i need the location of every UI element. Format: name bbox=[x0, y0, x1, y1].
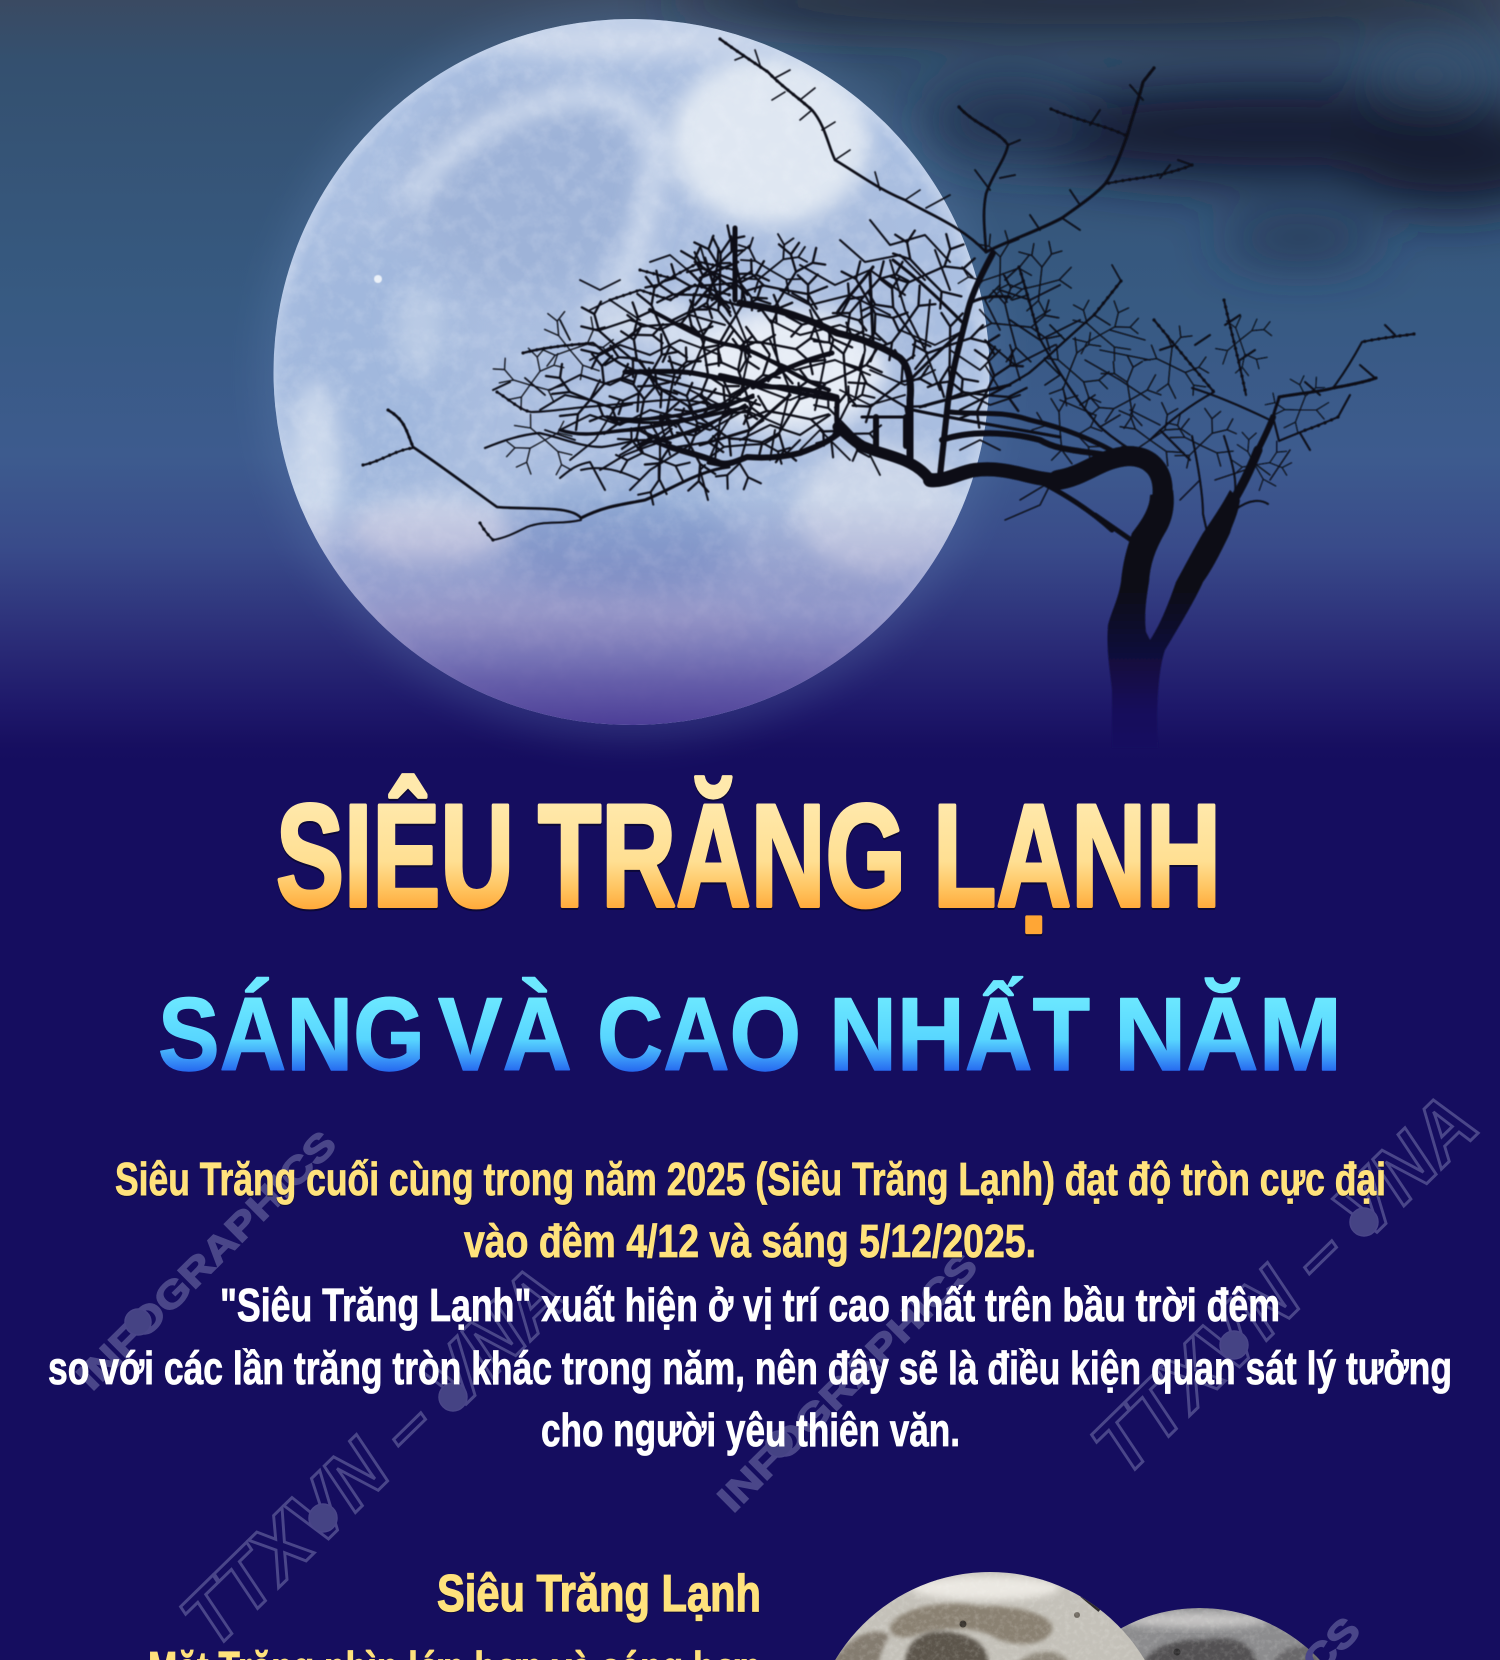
icon: full moon bbox=[270, 15, 995, 730]
twig clusters outer bbox=[492, 221, 1336, 501]
icon: moon glow bbox=[259, 4, 1003, 740]
icon: large moon bbox=[835, 1572, 1145, 1660]
buds bbox=[363, 39, 1414, 540]
watermark: Infographics and TTXVN - VNA: TTXVN – VNA bbox=[1075, 1078, 1494, 1491]
upper branch bbox=[720, 39, 986, 252]
icon: second moon (smaller) bbox=[1121, 1608, 1320, 1660]
subtitle: SÁNG VÀ CAO NHẤT NĂM bbox=[158, 977, 1342, 1093]
watermark: Infographics and TTXVN - VNA: INFOGRAPHICS bbox=[710, 1245, 985, 1520]
watermark: Infographics and TTXVN - VNA bbox=[69, 1078, 1494, 1660]
watermark: Infographics and TTXVN - VNA: TTXVN – VNA bbox=[164, 1250, 583, 1660]
subtitle: SÁNG VÀ CAO NHẤT NĂM: NĂM bbox=[1114, 977, 1342, 1093]
title: SIÊU TRĂNG LẠNH: TRĂNG bbox=[538, 774, 906, 937]
subtitle: SÁNG VÀ CAO NHẤT NĂM: SÁNG bbox=[158, 977, 425, 1093]
icon: dark clouds bbox=[660, 0, 1500, 258]
right upper branches bbox=[959, 107, 1008, 252]
panel: night sky bbox=[0, 0, 1500, 762]
trunk bbox=[1107, 490, 1240, 748]
right spread bbox=[1273, 378, 1376, 417]
subtitle: SÁNG VÀ CAO NHẤT NĂM: CAO bbox=[597, 977, 801, 1093]
subtitle: SÁNG VÀ CAO NHẤT NĂM: VÀ bbox=[438, 977, 572, 1093]
heading: Siêu Trăng Lạnh comparison: Siêu Trăng Lạnh bbox=[437, 1565, 761, 1623]
icon: tree silhouette bbox=[363, 39, 1414, 748]
watermark: Infographics and TTXVN - VNA: INFOGRAPHICS bbox=[69, 1123, 344, 1398]
text block: intro yellow bbox=[115, 1153, 1386, 1267]
text block: intro yellow: vào đêm 4/12 và sáng 5/12/2025. bbox=[464, 1215, 1036, 1267]
twig clusters over the moon bbox=[546, 215, 1035, 511]
title: SIÊU TRĂNG LẠNH: LẠNH bbox=[933, 774, 1221, 937]
main limbs bbox=[1058, 456, 1163, 500]
title: SIÊU TRĂNG LẠNH bbox=[276, 774, 1221, 937]
title: SIÊU TRĂNG LẠNH: SIÊU bbox=[276, 774, 514, 937]
dense twigs bbox=[540, 220, 950, 460]
text block: intro white: cho người yêu thiên văn. bbox=[541, 1404, 960, 1456]
text block: intro white bbox=[48, 1279, 1452, 1456]
subtitle: SÁNG VÀ CAO NHẤT NĂM: NHẤT bbox=[829, 977, 1090, 1093]
dense clump bbox=[690, 258, 745, 312]
